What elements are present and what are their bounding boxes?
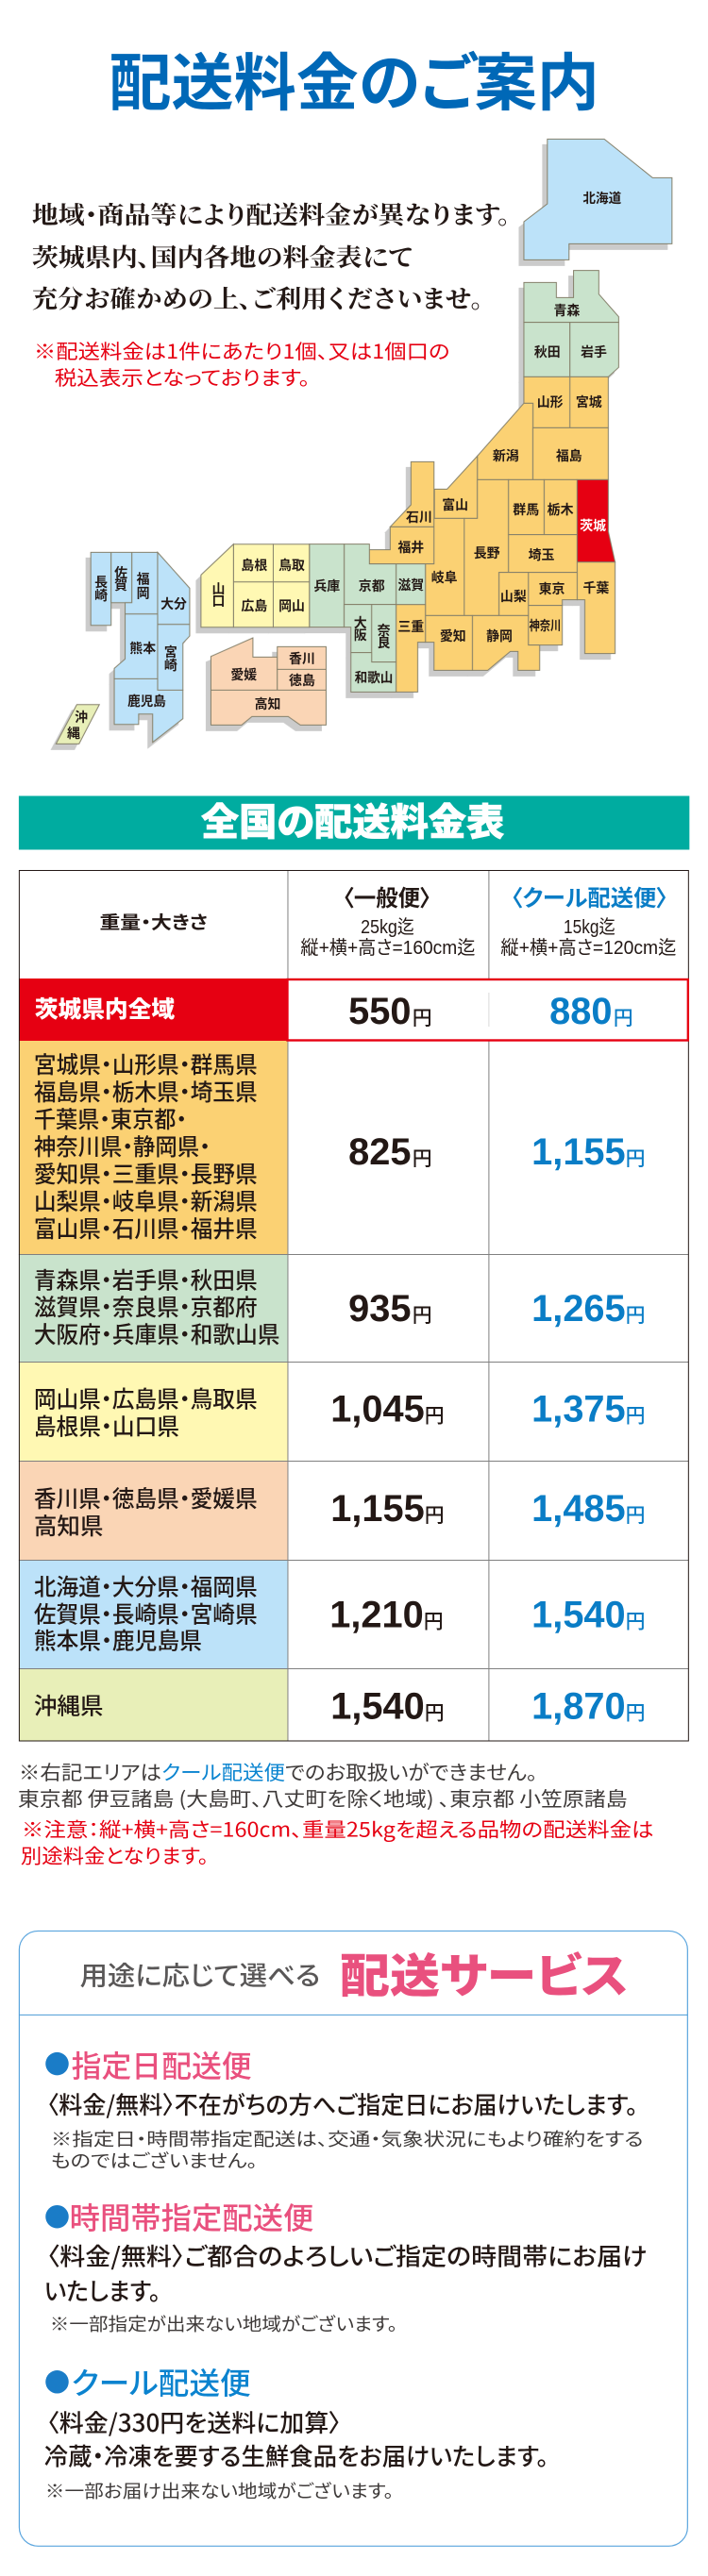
intro text: 茨城県内、国内各地の料金表にて <box>32 239 413 274</box>
row: northern Tohoku Kansai: 大阪府・兵庫県・和歌山県 <box>34 1317 280 1350</box>
table footnotes: 東京都 伊豆諸島 (大島町、八丈町を除く地域) 、東京都 小笠原諸島 <box>18 1784 628 1813</box>
row: Tohoku Kanto Chubu: 神奈川県・静岡県・ <box>34 1129 211 1163</box>
map prefecture labels: 滋賀 <box>397 577 424 593</box>
service: cool delivery: 冷蔵・冷凍を要する生鮮食品をお届けいたします。 <box>44 2437 548 2472</box>
panel: delivery services <box>19 1931 687 2546</box>
map prefecture labels: 良 <box>378 635 391 650</box>
map prefecture labels: 岡山 <box>278 598 305 613</box>
map prefecture labels: 鹿児島 <box>127 694 166 709</box>
row: Ibaraki: 550 <box>348 991 412 1032</box>
map prefecture labels <box>67 191 621 741</box>
table header: cool delivery: 15kg迄 <box>564 916 615 938</box>
map prefecture labels: 沖 <box>75 710 88 725</box>
table header: cool delivery <box>500 879 676 959</box>
map prefecture labels: 宮城 <box>576 394 602 410</box>
row: Tohoku Kanto Chubu: 富山県・石川県・福井県 <box>34 1212 258 1245</box>
service: cool delivery: クール配送便 <box>72 2360 251 2403</box>
service: time slot delivery: 時間帯指定配送便 <box>70 2195 313 2238</box>
service: time slot delivery: ※一部指定が出来ない地域がございます。 <box>50 2311 397 2336</box>
row: northern Tohoku Kansai: 滋賀県・奈良県・京都府 <box>34 1290 258 1323</box>
map prefecture labels: 青森 <box>553 303 580 318</box>
row: Tohoku Kanto Chubu: 1,155 <box>531 1131 626 1173</box>
service: specified date delivery <box>45 2043 644 2173</box>
row: Hokkaido Kyushu: 円 <box>626 1606 646 1634</box>
intro text: 地域・商品等により配送料金が異なります。 <box>32 196 511 231</box>
section heading bar: nationwide rates <box>19 793 689 849</box>
map prefecture labels: 宮 <box>164 644 177 660</box>
map prefecture labels: 愛媛 <box>230 667 257 682</box>
map prefecture labels: 愛知 <box>440 628 466 644</box>
map prefecture labels: 新潟 <box>493 448 519 463</box>
red tax note <box>34 337 450 392</box>
panel heading: 用途に応じて選べる <box>80 1956 320 1994</box>
map prefecture labels: 長 <box>94 575 108 590</box>
service: cool delivery: 〈料金/330円を送料に加算〉 <box>47 2404 341 2439</box>
red tax note: 税込表示となっております。 <box>55 363 310 392</box>
map prefecture labels: 岐阜 <box>431 570 458 585</box>
map prefecture labels: 崎 <box>94 588 108 603</box>
map prefecture labels: 長野 <box>474 545 500 560</box>
row: Ibaraki: 円 <box>413 1003 432 1031</box>
map prefecture labels: 石川 <box>406 510 432 525</box>
row: Tohoku Kanto Chubu: 宮城県・山形県・群馬県 <box>34 1047 258 1080</box>
map prefecture labels: 京都 <box>359 578 385 594</box>
map prefecture labels: 群馬 <box>513 502 539 517</box>
table header: cool delivery: 縦+横+高さ=120cm迄 <box>500 937 676 959</box>
row: Okinawa: 1,540 <box>330 1685 425 1727</box>
row: Tohoku Kanto Chubu: 山梨県・岐阜県・新潟県 <box>34 1184 258 1217</box>
service: time slot delivery: いたします。 <box>44 2273 160 2308</box>
map prefecture labels: 大分 <box>160 596 187 611</box>
map prefecture labels: 静岡 <box>486 628 513 644</box>
region: Kansai green <box>310 544 426 692</box>
row: Shikoku: 香川県・徳島県・愛媛県 <box>34 1481 258 1514</box>
map prefecture labels: 縄 <box>67 726 80 741</box>
table header: standard delivery: 25kg迄 <box>361 916 414 938</box>
row: Chugoku: 岡山県・広島県・鳥取県 <box>34 1382 258 1415</box>
service: specified date delivery: 〈料金/無料〉不在がちの方へご指定日にお届けいたします。 <box>47 2086 638 2121</box>
row: Hokkaido Kyushu: 北海道・大分県・福岡県 <box>34 1569 258 1603</box>
region: Ibaraki red <box>577 479 615 562</box>
row: Hokkaido Kyushu: 1,540 <box>531 1594 626 1635</box>
map prefecture labels: 和歌山 <box>355 670 393 685</box>
map prefecture labels: 山梨 <box>500 589 527 604</box>
row: Hokkaido Kyushu <box>34 1569 646 1657</box>
map prefecture labels: 福井 <box>397 540 424 555</box>
row: northern Tohoku Kansai: 円 <box>626 1300 646 1329</box>
row: northern Tohoku Kansai: 935 <box>348 1288 412 1330</box>
map prefecture labels: 千葉 <box>583 580 609 595</box>
region: Okinawa <box>56 705 99 744</box>
row: Okinawa: 1,870 <box>531 1685 626 1727</box>
service: specified date delivery: 指定日配送便 <box>72 2043 252 2086</box>
row: Chugoku <box>34 1382 646 1443</box>
region: northern Tohoku <box>524 271 618 376</box>
map prefecture labels: 香川 <box>289 651 315 666</box>
row: Hokkaido Kyushu: 佐賀県・長崎県・宮崎県 <box>34 1597 258 1630</box>
table header: standard delivery <box>300 879 476 959</box>
map prefecture labels: 島根 <box>241 558 267 573</box>
row: Tohoku Kanto Chubu: 825 <box>348 1131 412 1173</box>
table header: standard delivery: 縦+横+高さ=160cm迄 <box>300 937 476 959</box>
table row fills <box>19 979 287 1741</box>
map prefecture labels: 崎 <box>164 658 177 673</box>
map prefecture labels: 茨城 <box>580 518 606 533</box>
region: central Japan orange <box>369 376 615 692</box>
map prefecture labels: 口 <box>212 594 226 609</box>
map prefecture labels: 東京 <box>539 581 565 596</box>
table footnotes <box>18 1758 654 1870</box>
map prefecture labels: 阪 <box>354 627 367 643</box>
map prefecture labels: 山形 <box>537 394 564 410</box>
region: Chugoku yellow <box>201 544 310 627</box>
row: Okinawa <box>34 1685 646 1727</box>
row: northern Tohoku Kansai: 円 <box>413 1300 432 1329</box>
row: Tohoku Kanto Chubu: 愛知県・三重県・長野県 <box>34 1157 258 1190</box>
map prefecture labels: 鳥取 <box>278 558 305 573</box>
row: Chugoku: 島根県・山口県 <box>34 1409 179 1443</box>
map prefecture labels: 岩手 <box>581 344 607 360</box>
map prefecture labels: 岡 <box>137 585 150 601</box>
map prefecture labels: 兵庫 <box>313 578 340 594</box>
map prefecture labels: 高知 <box>255 696 281 711</box>
row: Shikoku: 高知県 <box>34 1509 103 1542</box>
map prefecture labels: 賀 <box>114 577 127 593</box>
map prefecture labels: 大 <box>354 615 367 630</box>
row: Hokkaido Kyushu: 熊本県・鹿児島県 <box>34 1624 202 1657</box>
map prefecture labels: 奈 <box>378 623 391 638</box>
service: cool delivery: ※一部お届け出来ない地域がございます。 <box>45 2478 394 2503</box>
row: Hokkaido Kyushu: 円 <box>424 1606 444 1634</box>
row: Okinawa: 沖縄県 <box>34 1688 103 1721</box>
row: Okinawa: 円 <box>626 1698 646 1726</box>
row: Tohoku Kanto Chubu: 円 <box>413 1144 432 1172</box>
map prefecture labels: 富山 <box>442 497 468 512</box>
map prefecture labels: 福島 <box>556 448 582 463</box>
row: Tohoku Kanto Chubu: 千葉県・東京都・ <box>34 1102 187 1135</box>
region: Shikoku peach <box>211 638 326 725</box>
panel heading: 配送サービス <box>340 1939 629 2007</box>
row: Shikoku: 1,485 <box>531 1488 626 1530</box>
intro text: 充分お確かめの上、ご利用くださいませ。 <box>32 280 483 315</box>
service: time slot delivery: 〈料金/無料〉ご都合のよろしいご指定の時間帯にお届け <box>47 2237 648 2272</box>
row: Chugoku: 円 <box>425 1400 445 1430</box>
row: Shikoku: 円 <box>626 1500 646 1529</box>
map prefecture labels: 福 <box>137 571 150 587</box>
table footnotes: 別途料金となります。 <box>21 1841 209 1870</box>
rate table <box>19 870 688 1741</box>
table header: standard delivery: 〈一般便〉 <box>343 879 431 912</box>
service: specified date delivery: ものではございません。 <box>51 2148 258 2173</box>
row: Okinawa: 円 <box>425 1698 445 1726</box>
map prefecture labels: 栃木 <box>548 502 574 517</box>
section heading bar: nationwide rates: 全国の配送料金表 <box>201 793 504 846</box>
map prefecture labels: 秋田 <box>534 344 561 360</box>
row: Shikoku <box>34 1481 646 1542</box>
map prefecture labels: 熊本 <box>129 641 156 656</box>
map of Japan <box>56 139 672 744</box>
service: time slot delivery <box>44 2195 648 2336</box>
row: Shikoku: 円 <box>425 1500 445 1529</box>
table header: weight and size: 重量・大きさ <box>99 909 208 934</box>
map prefecture labels: 広島 <box>241 598 267 613</box>
row: Chugoku: 円 <box>626 1400 646 1430</box>
row: northern Tohoku Kansai: 1,265 <box>531 1288 626 1330</box>
service: cool delivery <box>44 2360 548 2503</box>
row: Chugoku: 1,045 <box>330 1388 425 1430</box>
title: 配送料金のご案内 <box>109 33 599 123</box>
intro text <box>32 196 511 315</box>
table footnotes: ※注意：縦+横+高さ=160cm、重量25kgを超える品物の配送料金は <box>22 1815 654 1844</box>
red tax note: ※配送料金は1件にあたり1個、又は1個口の <box>34 337 450 365</box>
row: Tohoku Kanto Chubu <box>34 1047 646 1245</box>
table header: cool delivery: 〈クール配送便〉 <box>511 879 667 912</box>
row: Shikoku: 1,155 <box>330 1488 425 1530</box>
table footnotes: ※右記エリアは クール配送便 でのお取扱いができません。 <box>19 1758 537 1786</box>
row: northern Tohoku Kansai <box>34 1263 646 1350</box>
map prefecture labels: 埼玉 <box>529 547 554 562</box>
row: Chugoku: 1,375 <box>531 1388 626 1430</box>
region: Hokkaido <box>524 139 672 259</box>
panel heading <box>80 1939 629 2007</box>
map prefecture labels: 佐 <box>114 565 127 580</box>
Ibaraki price highlight border <box>287 979 688 1040</box>
map prefecture labels: 北海道 <box>582 191 621 206</box>
map prefecture labels: 徳島 <box>289 673 315 688</box>
row: Ibaraki <box>35 991 633 1032</box>
row: Hokkaido Kyushu: 1,210 <box>329 1594 424 1635</box>
service: specified date delivery: ※指定日・時間帯指定配送は、交通・気象状況にもより確約をする <box>51 2126 644 2151</box>
row: Ibaraki: 880 <box>549 991 612 1032</box>
row: Ibaraki: 円 <box>614 1003 633 1031</box>
row: Tohoku Kanto Chubu: 円 <box>626 1144 646 1172</box>
map prefecture labels: 神奈川 <box>529 618 561 633</box>
row: northern Tohoku Kansai: 青森県・岩手県・秋田県 <box>34 1263 258 1296</box>
region: Kyushu blue <box>91 552 190 743</box>
row: Ibaraki: 茨城県内全域 <box>35 992 176 1025</box>
map prefecture labels: 三重 <box>397 619 424 634</box>
map prefecture labels: 山 <box>212 581 226 596</box>
row: Tohoku Kanto Chubu: 福島県・栃木県・埼玉県 <box>34 1075 258 1108</box>
